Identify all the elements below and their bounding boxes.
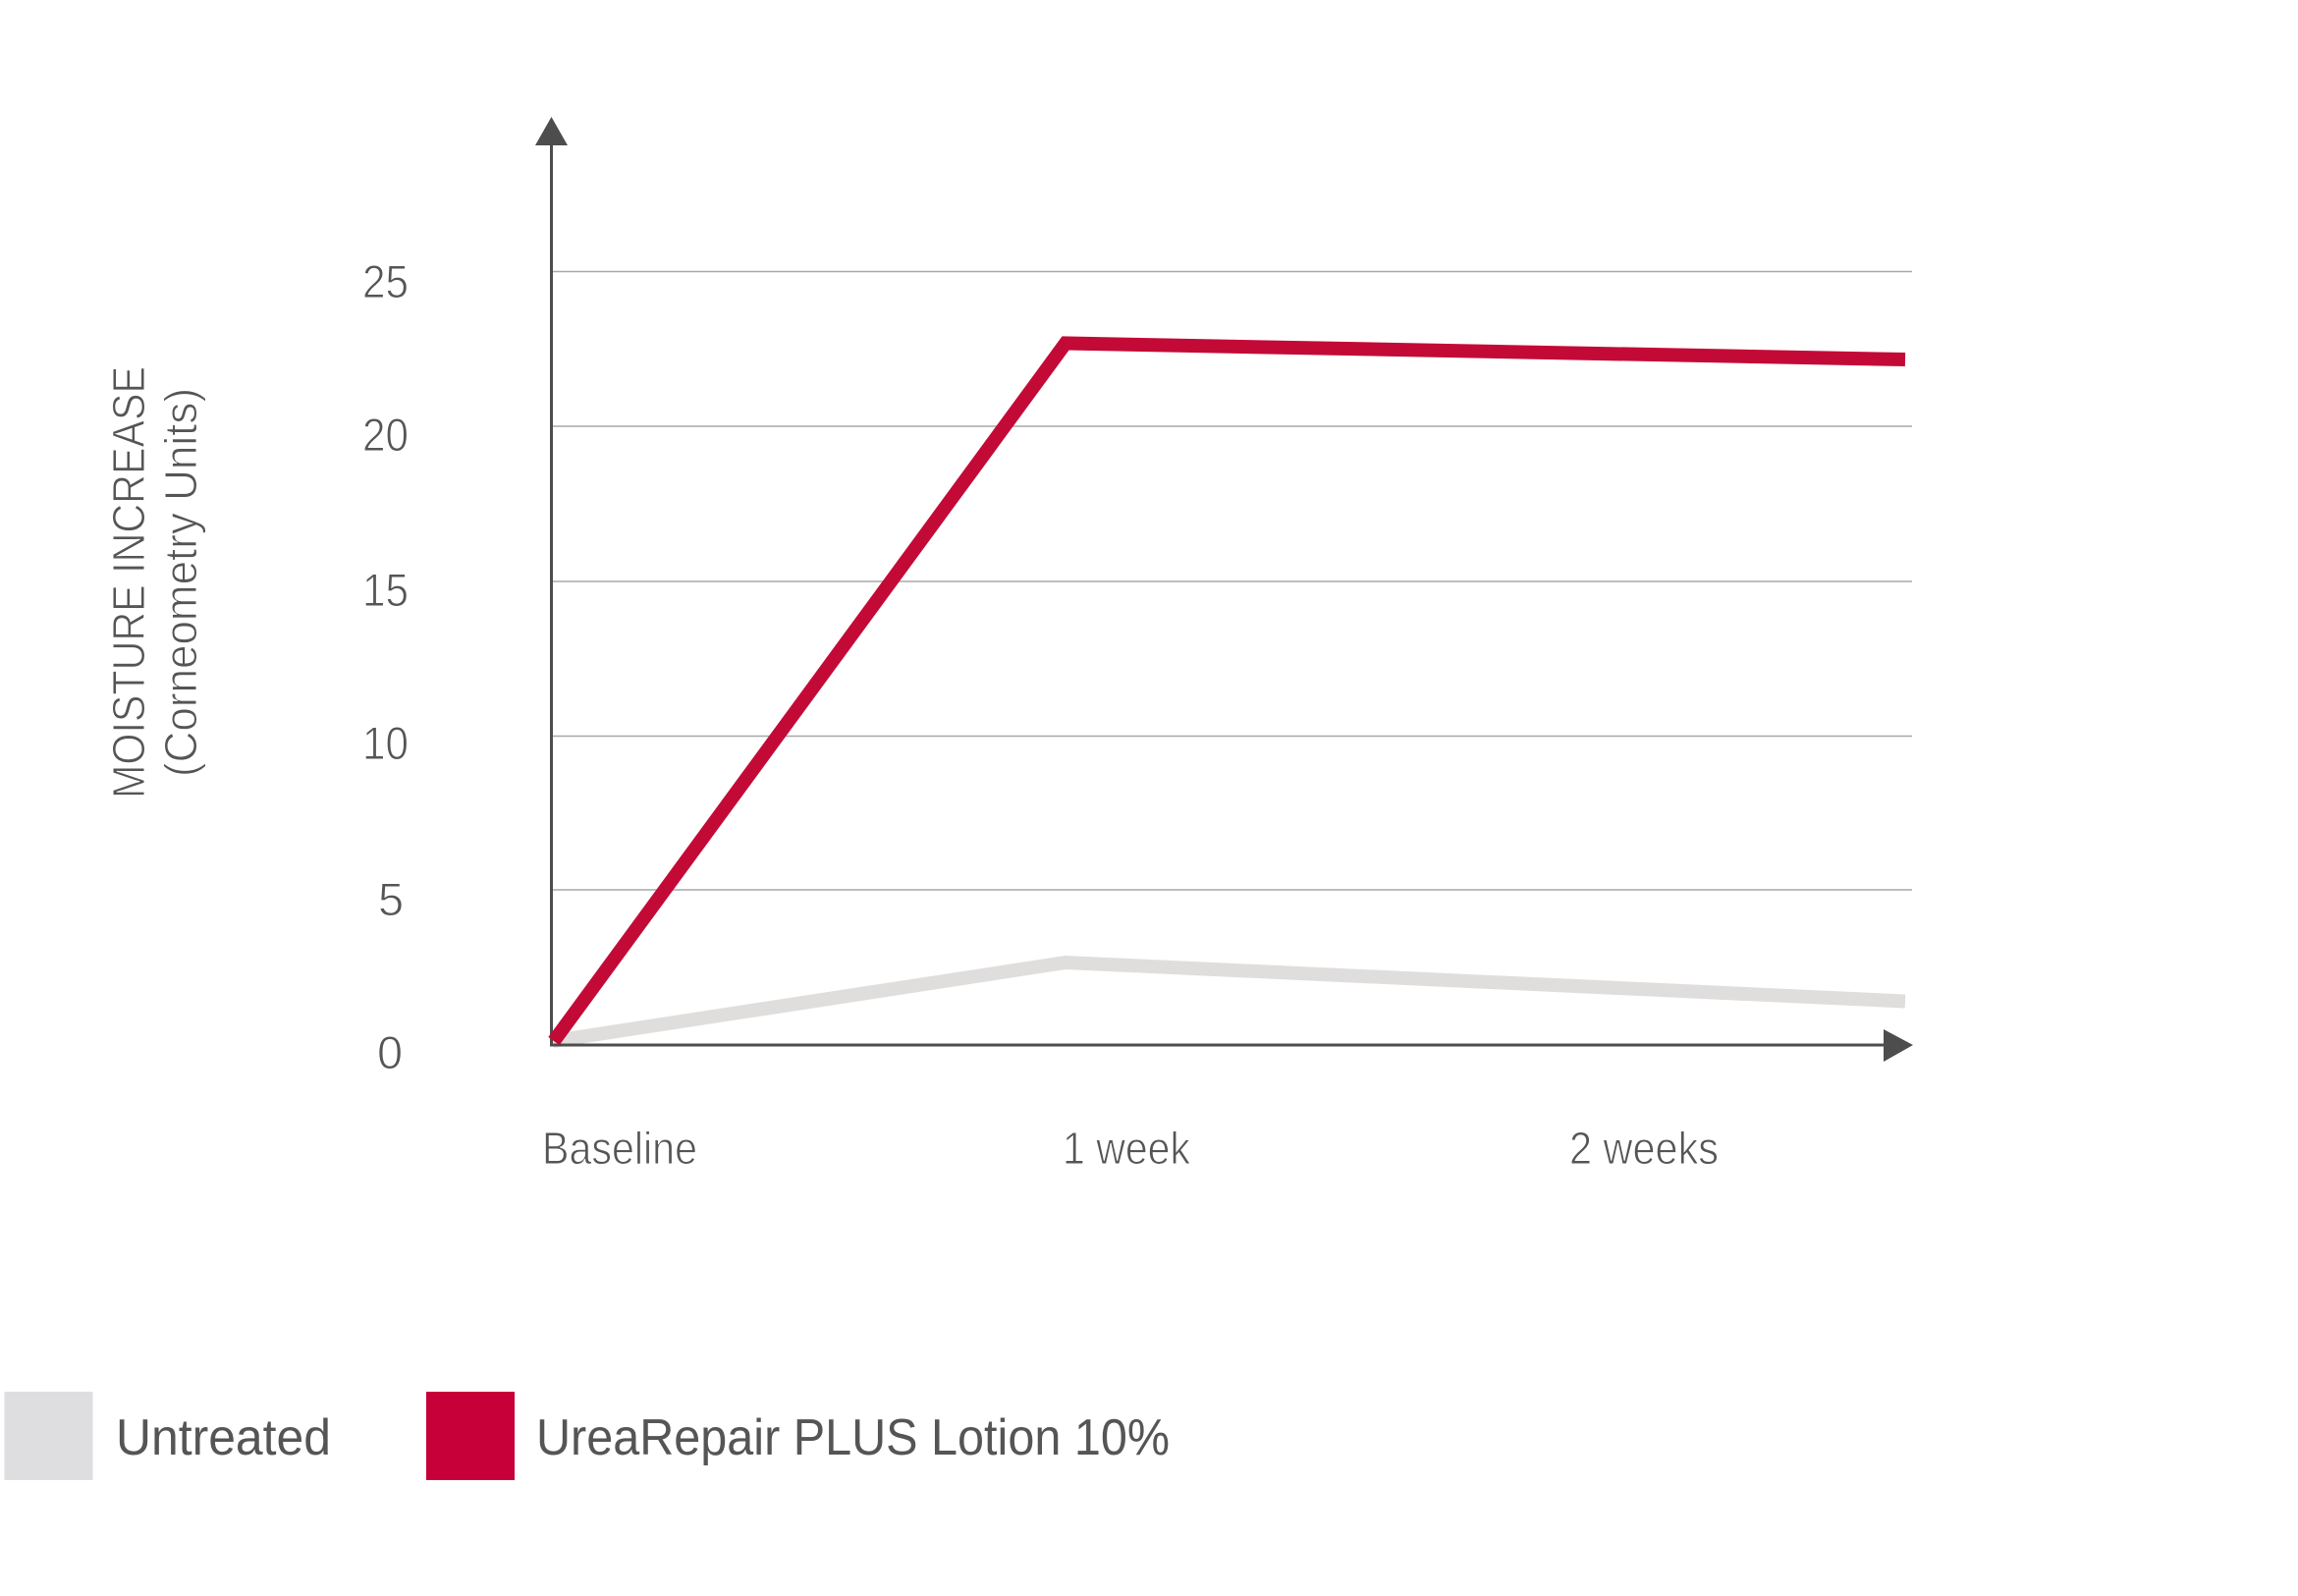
x axis arrow bbox=[550, 1029, 1913, 1062]
legend: UreaRepair PLUS Lotion 10%: UreaRepair PLUS Lotion 10% bbox=[536, 1409, 1170, 1466]
horizontal grid lines bbox=[552, 271, 1912, 890]
y-axis title bbox=[103, 366, 206, 798]
legend: untreated bbox=[4, 1392, 331, 1480]
y-axis tick labels: 5 bbox=[378, 873, 404, 925]
y-axis tick labels: 15 bbox=[362, 564, 409, 616]
x-axis labels bbox=[542, 1123, 1719, 1174]
y axis arrow bbox=[535, 117, 568, 1046]
y-axis tick labels: 0 bbox=[377, 1026, 403, 1078]
y-axis tick labels bbox=[362, 255, 409, 1078]
x-axis labels: 2 weeks bbox=[1569, 1123, 1719, 1174]
y-axis tick labels: 10 bbox=[362, 717, 409, 769]
legend: untreated: Untreated bbox=[116, 1409, 331, 1466]
series line: untreated bbox=[553, 963, 1905, 1041]
y-axis tick labels: 25 bbox=[362, 255, 409, 307]
series line: UreaRepair PLUS Lotion 10% bbox=[554, 344, 1905, 1041]
x-axis labels: 1 week bbox=[1063, 1123, 1191, 1174]
y-axis tick labels: 20 bbox=[362, 409, 409, 461]
legend: UreaRepair PLUS Lotion 10% bbox=[426, 1392, 1170, 1480]
y-axis title: MOISTURE INCREASE bbox=[103, 366, 154, 798]
y-axis title: (Corneometry Units) bbox=[155, 388, 206, 777]
x-axis labels: Baseline bbox=[542, 1123, 697, 1174]
